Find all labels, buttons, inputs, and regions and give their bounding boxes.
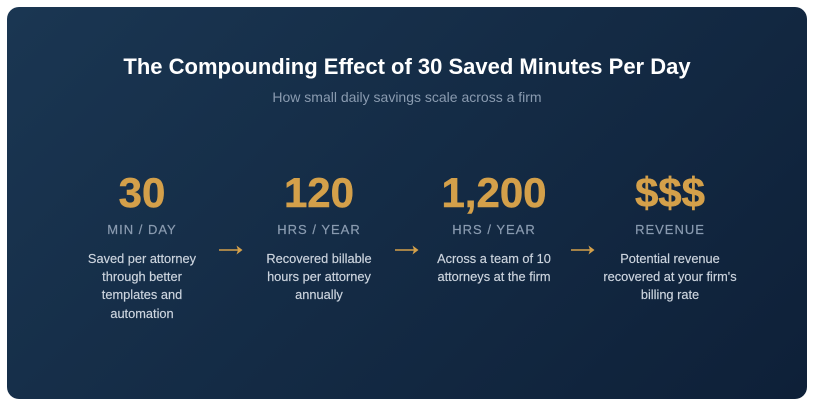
number: 120: 120 bbox=[284, 169, 354, 216]
description: saved per attorney: Saved per attorney bbox=[88, 251, 196, 266]
number: 30: 30 bbox=[119, 169, 165, 216]
description: saved per attorney: through better bbox=[102, 269, 182, 284]
title: The Compounding Effect of 30 Saved Minutes Per Day bbox=[123, 54, 691, 79]
unit: hours per year: HRS / YEAR bbox=[277, 222, 361, 237]
description: saved per attorney: automation bbox=[110, 306, 174, 321]
unit: revenue: REVENUE bbox=[635, 222, 705, 237]
description: recovered billable hours: annually bbox=[295, 287, 343, 302]
description: potential revenue: Potential revenue bbox=[620, 251, 720, 266]
description: potential revenue: billing rate bbox=[641, 287, 699, 302]
unit: min per day: MIN / DAY bbox=[107, 222, 177, 237]
arrow: step 2 to 3 bbox=[395, 246, 418, 254]
step: 30 min per day bbox=[88, 169, 196, 321]
step: 120 hours per year bbox=[266, 169, 372, 302]
description: team of 10 attorneys: Across a team of 10 bbox=[437, 251, 551, 266]
description: potential revenue bbox=[603, 251, 737, 302]
description: recovered billable hours: Recovered billable bbox=[266, 251, 372, 266]
description: recovered billable hours: hours per attorney bbox=[267, 269, 371, 284]
description: saved per attorney bbox=[88, 251, 196, 321]
step: revenue bbox=[603, 169, 737, 302]
arrow: step 3 to 4 bbox=[571, 246, 594, 254]
description: team of 10 attorneys: attorneys at the firm bbox=[437, 269, 551, 284]
step: 1,200 hours per year bbox=[437, 169, 551, 284]
description: team of 10 attorneys bbox=[437, 251, 551, 284]
description: recovered billable hours bbox=[266, 251, 372, 302]
description: potential revenue: recovered at your firm's bbox=[603, 269, 737, 284]
subtitle: How small daily savings scale across a firm bbox=[272, 89, 542, 105]
number: dollar signs: $$$ bbox=[635, 169, 705, 216]
unit: hours per year: HRS / YEAR bbox=[452, 222, 536, 237]
number: 1,200: 1,200 bbox=[441, 169, 547, 216]
description: saved per attorney: templates and bbox=[102, 287, 182, 302]
arrow: step 1 to 2 bbox=[219, 246, 242, 254]
